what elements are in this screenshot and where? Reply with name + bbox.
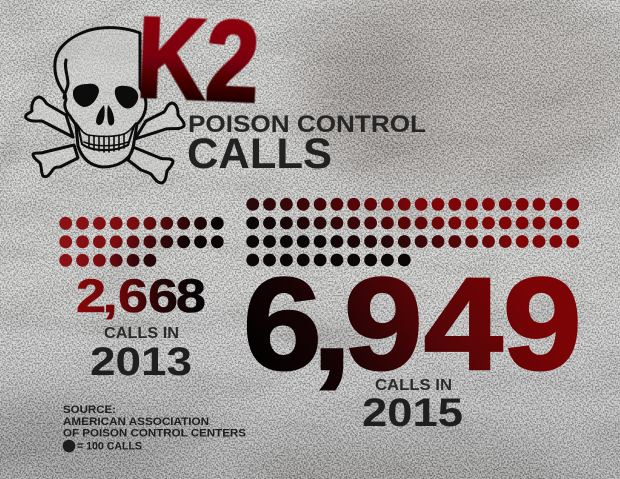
source note: AMERICAN ASSOCIATION bbox=[63, 416, 209, 428]
legend: dot equals 100 calls: = 100 CALLS bbox=[77, 440, 142, 452]
crossbone lower left bbox=[33, 145, 78, 177]
dot chart: 2013 bbox=[59, 217, 224, 267]
year: 2015: 2015 bbox=[362, 391, 463, 435]
label: calls in (2013): CALLS IN bbox=[104, 325, 179, 342]
heading: poison control: POISON CONTROL bbox=[188, 111, 426, 138]
dot chart: 2015 bbox=[246, 198, 579, 266]
nose bbox=[96, 105, 105, 125]
number: 6,949: 6,949 bbox=[243, 251, 582, 397]
crossbone lower right bbox=[128, 147, 173, 183]
skull inner contour bbox=[64, 60, 68, 98]
source note: OF POISON CONTROL CENTERS bbox=[63, 428, 246, 440]
teeth bbox=[76, 123, 136, 152]
source note: SOURCE: bbox=[63, 404, 116, 416]
heading: calls: CALLS bbox=[187, 130, 332, 178]
label: calls in (2015): CALLS IN bbox=[375, 377, 452, 394]
eye sockets bbox=[73, 84, 99, 107]
source note bbox=[63, 404, 246, 440]
skull head bbox=[55, 28, 146, 167]
icon: skull and crossbones bbox=[26, 28, 184, 183]
number: 2,668: 2,668 bbox=[76, 269, 206, 322]
crossbone upper left bbox=[26, 97, 73, 137]
year: 2013: 2013 bbox=[90, 340, 192, 384]
crossbone upper right bbox=[135, 103, 184, 139]
